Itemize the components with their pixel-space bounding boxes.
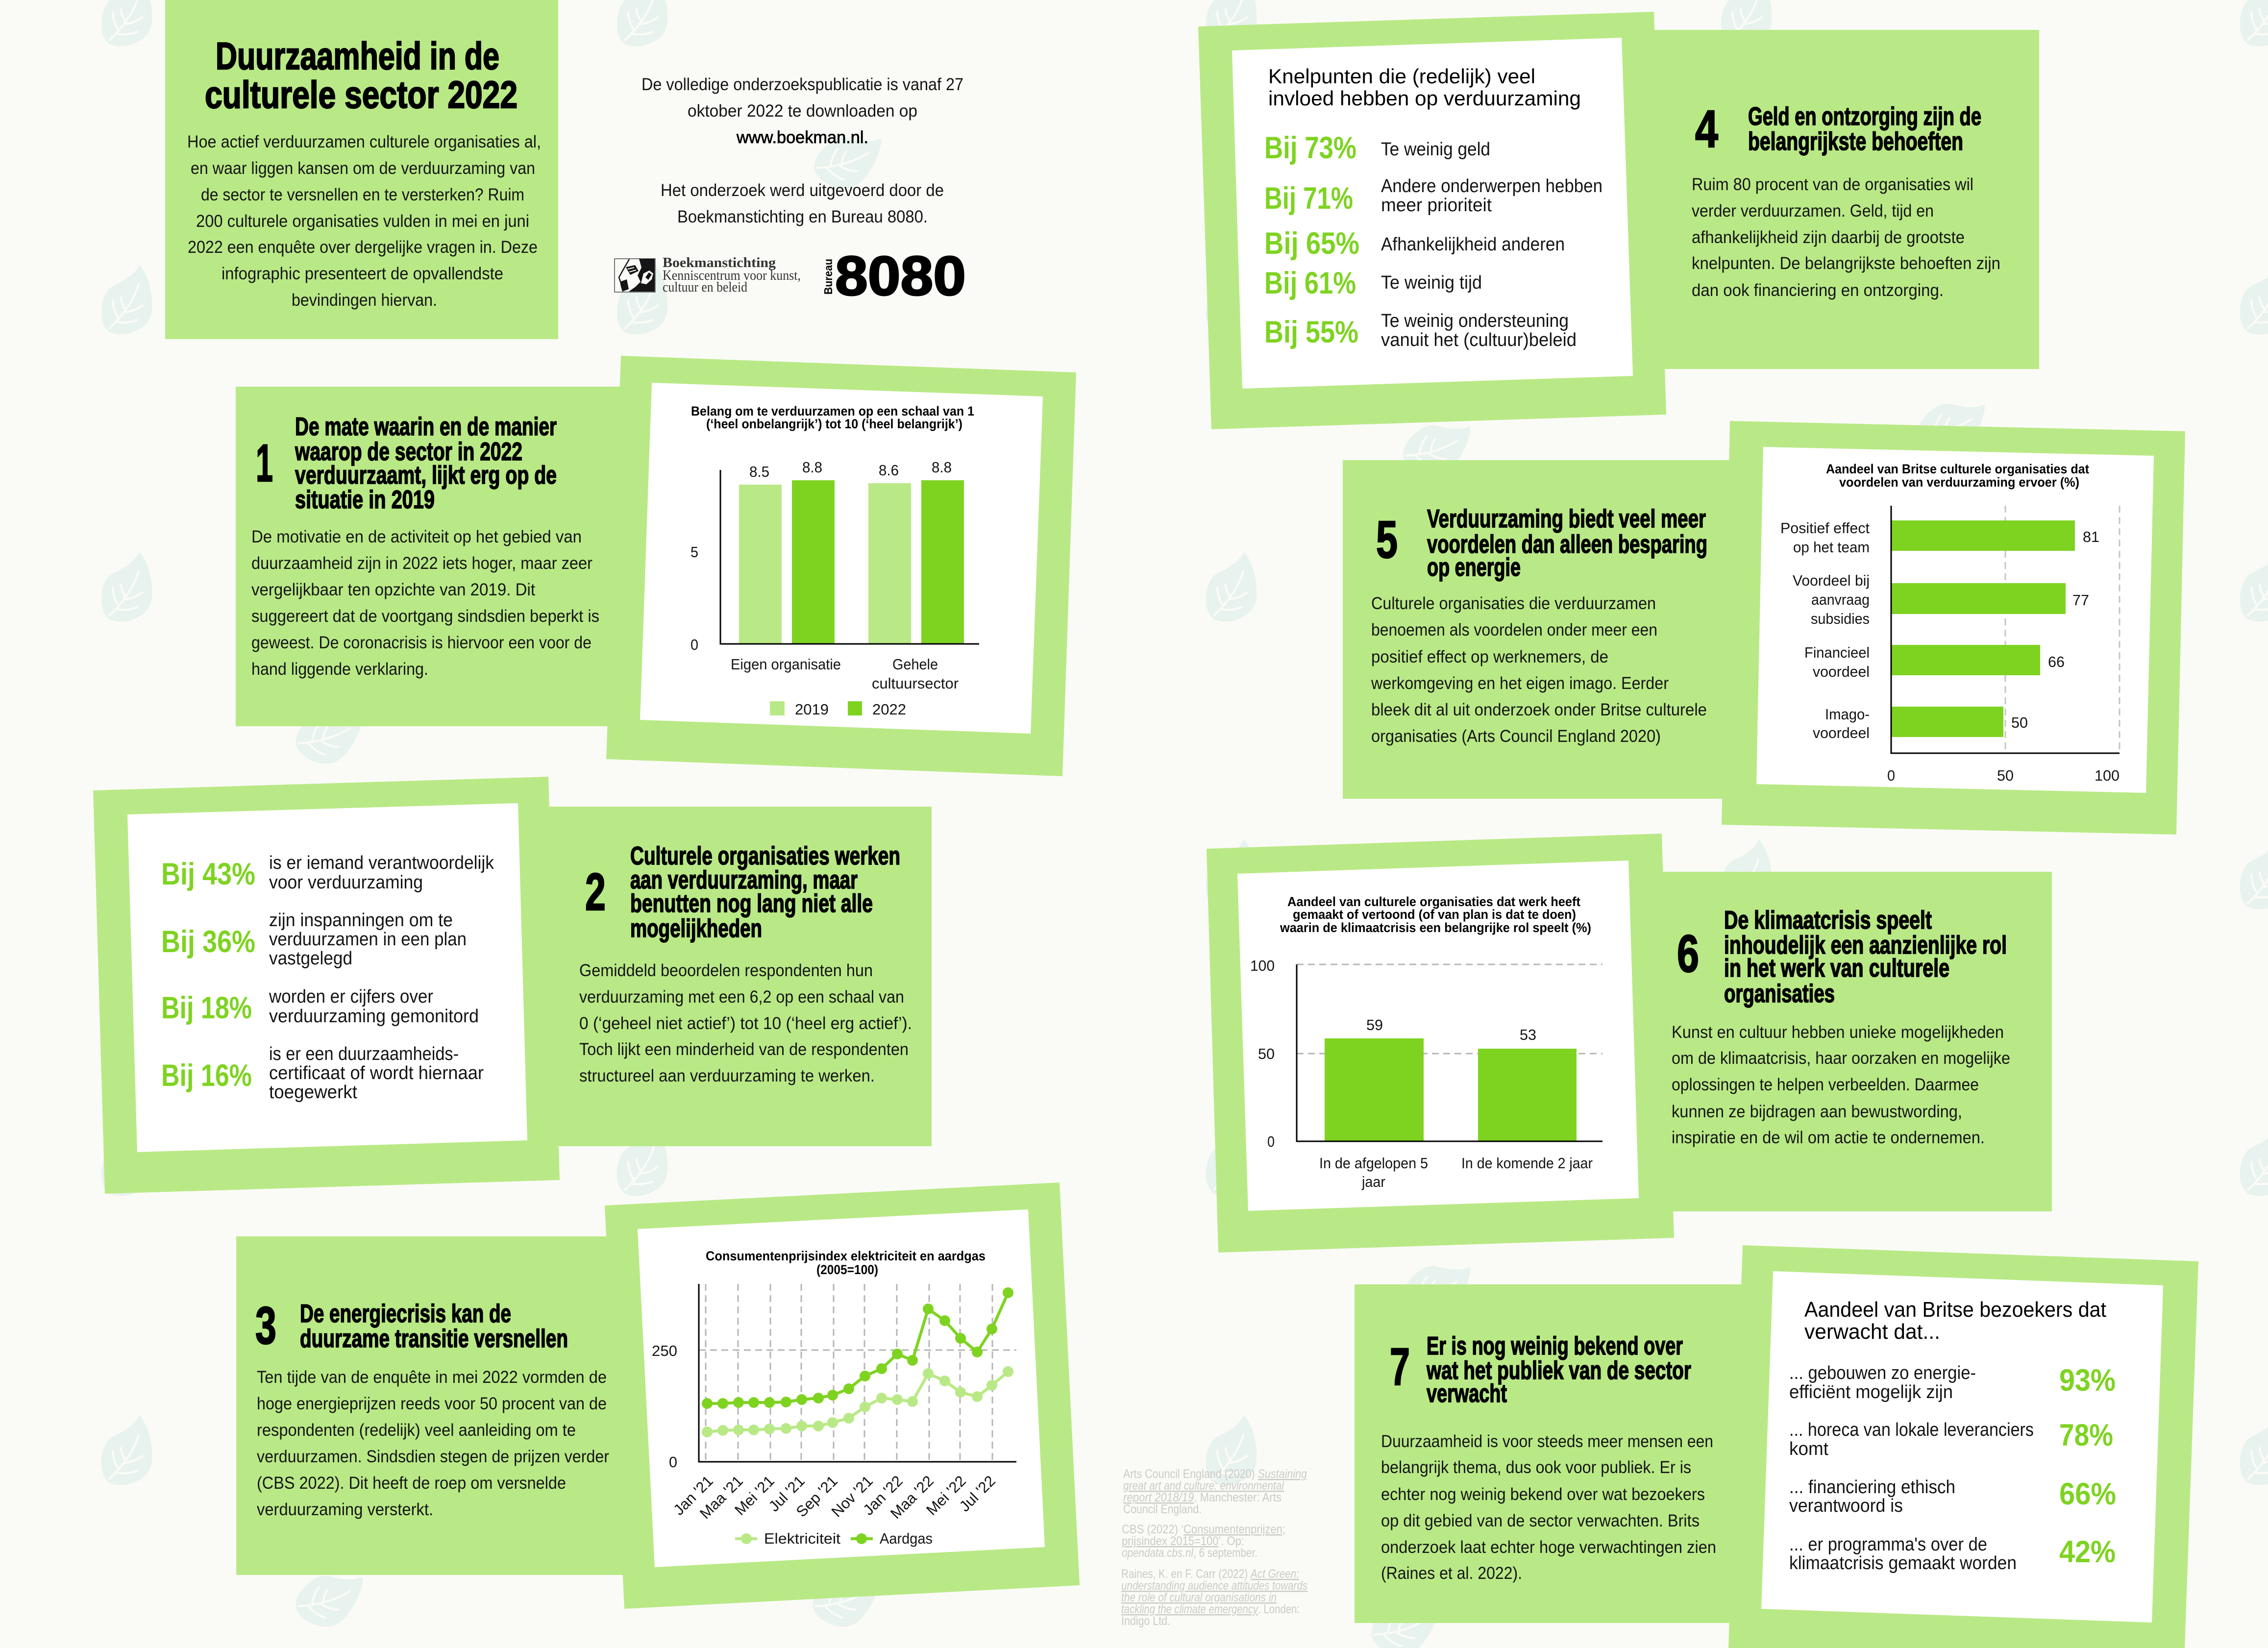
horizontal bar chart: benefits: 81 [2083, 528, 2099, 545]
visitors rows [1789, 1363, 2034, 1574]
heading 6: in het werk van culturele [1724, 954, 1949, 983]
heading 6: organisaties [1724, 980, 1835, 1008]
visitors title: Aandeel van Britse bezoekers dat [1804, 1298, 2106, 1322]
body text 3: (CBS 2022). Dit heeft de roep om versnelde [257, 1474, 566, 1493]
visitors rows: ... horeca van lokale leveranciers [1789, 1420, 2034, 1440]
body text 1: duurzaamheid zijn in 2022 iets hoger, maar zeer [251, 554, 592, 573]
introduction text: 2022 een enquête over dergelijke vragen in. Deze [188, 238, 538, 257]
bottlenecks labels: vanuit het (cultuur)beleid [1381, 330, 1577, 350]
chart title: Consumentenprijsindex elektriciteit en aardgas [706, 1249, 986, 1263]
heading 3 [300, 1300, 568, 1353]
heading 5: op energie [1427, 553, 1521, 582]
panel: bottlenecks frame [1198, 12, 1666, 429]
number 6: 6 [1677, 924, 1699, 983]
horizontal bar chart: benefits: Imago- [1825, 706, 1870, 723]
row 43% [161, 853, 494, 893]
horizontal bar chart: benefits [1780, 506, 2120, 784]
heading 1: waarop de sector in 2022 [295, 438, 522, 466]
row 36%: vastgelegd [269, 948, 352, 969]
introduction text: bevindingen hiervan. [292, 291, 437, 310]
publication note: Het onderzoek werd uitgevoerd door de [661, 181, 944, 200]
heading 1: verduurzaamt, lijkt erg op de [295, 461, 557, 490]
line chart: price index: Jan '21 [670, 1472, 716, 1519]
body text 4: Ruim 80 procent van de organisaties wil [1692, 175, 1973, 194]
chart title [706, 1249, 986, 1277]
heading 6: inhoudelijk een aanzienlijke rol [1724, 931, 2007, 959]
references: Raines, K. en F. Carr (2022) Act Green: [1121, 1567, 1299, 1581]
heading 2: Culturele organisaties werken [630, 842, 900, 870]
introduction text: Hoe actief verduurzamen culturele organisaties al, [187, 132, 541, 151]
references: the role of cultural organisations in [1121, 1591, 1277, 1604]
body text 1: hand liggende verklaring. [251, 660, 428, 679]
bar chart: importance: 0 [690, 636, 698, 653]
row 36% [161, 910, 467, 969]
bar chart: climate work: jaar [1361, 1173, 1385, 1190]
logo: Boekmanstichting [615, 255, 801, 295]
logo: Bureau 8080: Bureau [822, 259, 835, 295]
references [1121, 1467, 1307, 1628]
row 43%: voor verduurzaming [269, 872, 423, 893]
bar chart: climate work: In de komende 2 jaar [1461, 1155, 1593, 1172]
heading 7: verwacht [1427, 1379, 1507, 1408]
body text 2: Gemiddeld beoordelen respondenten hun [579, 961, 873, 980]
legend [735, 1530, 933, 1547]
chart title: voordelen van verduurzaming ervoer (%) [1839, 475, 2079, 490]
body text 5 [1371, 594, 1707, 746]
body text 5: positief effect op werknemers, de [1371, 647, 1608, 666]
publication note: Boekmanstichting en Bureau 8080. [677, 207, 928, 226]
line chart: price index: Jan '22 [860, 1472, 906, 1519]
bar chart: climate work: 59 [1366, 1016, 1383, 1033]
heading 3: duurzame transitie versnellen [300, 1325, 568, 1353]
chart title: Aandeel van Britse culturele organisaties dat [1826, 462, 2089, 476]
bottlenecks percentages [1264, 131, 1359, 349]
body text 2 [579, 961, 912, 1085]
body text 1: suggereert dat de voortgang sindsdien beperkt is [251, 607, 599, 626]
body text 7 [1381, 1432, 1716, 1583]
row 16%: toegewerkt [269, 1082, 357, 1103]
row 18%: verduurzaming gemonitord [269, 1006, 479, 1027]
bar chart: climate work: In de afgelopen 5 [1319, 1155, 1428, 1172]
bar chart: importance [690, 459, 979, 692]
heading 4: Geld en ontzorging zijn de [1748, 102, 1981, 131]
heading 5: Verduurzaming biedt veel meer [1427, 505, 1706, 533]
bottlenecks labels: Te weinig ondersteuning [1381, 311, 1569, 331]
bottlenecks percentages: Bij 73% [1264, 131, 1356, 165]
visitors percentages: 93% [2059, 1363, 2116, 1398]
bar chart: climate work: 53 [1520, 1026, 1536, 1043]
row 16% [161, 1044, 484, 1103]
horizontal bar chart: benefits: 50 [1997, 767, 2014, 784]
chart title: (‘heel onbelangrijk’) tot 10 (‘heel belangrijk’) [706, 417, 962, 431]
line chart: price index [652, 1284, 1016, 1522]
chart title: waarin de klimaatcrisis een belangrijke rol speelt (%) [1280, 920, 1591, 935]
horizontal bar chart: benefits: subsidies [1811, 610, 1870, 627]
bar chart: climate work [1250, 957, 1602, 1190]
row 36%: verduurzamen in een plan [269, 929, 467, 950]
logo: Bureau 8080: 8080 [835, 245, 966, 307]
panel: finding 1 [236, 387, 632, 726]
body text 6: kunnen ze bijdragen aan bewustwording, [1672, 1102, 1962, 1121]
body text 3: Ten tijde van de enquête in mei 2022 vormden de [257, 1368, 607, 1387]
heading 1: De mate waarin en de manier [295, 413, 557, 441]
visitors percentages [2059, 1363, 2116, 1569]
introduction text: 200 culturele organisaties vulden in mei en juni [196, 212, 529, 231]
body text 4: dan ook financiering en ontzorging. [1692, 281, 1944, 300]
body text 4 [1692, 175, 2000, 300]
number 3: 3 [255, 1296, 276, 1355]
title [205, 34, 518, 116]
references: Arts Council England (2020) Sustaining [1123, 1467, 1307, 1481]
number 5: 5 [1376, 510, 1398, 569]
body text 6 [1672, 1023, 2010, 1147]
row 36%: Bij 36% [161, 925, 255, 959]
panel: finding 4 [1642, 30, 2039, 369]
body text 5: Culturele organisaties die verduurzamen [1371, 594, 1656, 613]
horizontal bar chart: benefits: Voordeel bij [1793, 572, 1870, 589]
body text 2: verduurzaming met een 6,2 op een schaal van [579, 987, 904, 1007]
panel: frame with percentages 2 [93, 777, 560, 1194]
row 43%: Bij 43% [161, 857, 255, 891]
horizontal bar chart: benefits: 0 [1887, 767, 1895, 784]
chart title [1826, 462, 2089, 490]
line chart: price index: Nov '21 [828, 1472, 876, 1521]
bar chart: climate work: 50 [1258, 1045, 1275, 1062]
references: CBS (2022) ‘Consumentenprijzen; [1122, 1523, 1285, 1536]
row 16%: is er een duurzaamheids- [269, 1044, 459, 1064]
panel: visitors frame [1728, 1245, 2198, 1648]
body text 7: echter nog weinig bekend over wat bezoekers [1381, 1485, 1705, 1504]
logo: Boekmanstichting: Kenniscentrum voor kunst, [663, 268, 801, 283]
bar chart: importance: 8.5 [749, 463, 769, 480]
panel: finding 6 [1647, 872, 2052, 1211]
bottlenecks percentages: Bij 55% [1264, 315, 1358, 349]
body text 7: Duurzaamheid is voor steeds meer mensen een [1381, 1432, 1713, 1451]
number 7: 7 [1390, 1337, 1410, 1396]
horizontal bar chart: benefits: voordeel [1813, 724, 1870, 741]
bar chart: importance: 8.8 [802, 459, 822, 476]
bar chart: importance: 8.8 [932, 459, 952, 476]
visitors rows: klimaatcrisis gemaakt worden [1789, 1553, 2017, 1574]
visitors rows: ... gebouwen zo energie- [1789, 1363, 1976, 1383]
logo: Boekmanstichting: cultuur en beleid [663, 280, 747, 295]
legend: 2022 [872, 701, 906, 718]
row 18% [161, 986, 479, 1027]
publication note: De volledige onderzoekspublicatie is vanaf 27 [641, 75, 963, 94]
line chart: price index: Mei '22 [923, 1472, 969, 1519]
bottlenecks labels [1381, 139, 1602, 350]
visitors rows: ... er programma's over de [1789, 1534, 1987, 1555]
body text 4: afhankelijkheid zijn daarbij de grootste [1692, 228, 1965, 247]
references: understanding audience attitudes towards [1121, 1579, 1307, 1593]
bottlenecks labels: Andere onderwerpen hebben [1381, 176, 1602, 197]
heading 2: mogelijkheden [630, 914, 762, 943]
horizontal bar chart: benefits: Financieel [1804, 644, 1870, 661]
body text 7: op dit gebied van de sector verwachten. Brits [1381, 1511, 1700, 1530]
horizontal bar chart: benefits: 77 [2072, 591, 2089, 609]
body text 7: onderzoek laat echter hoge verwachtingen zien [1381, 1538, 1716, 1557]
visitors percentages: 66% [2059, 1477, 2116, 1511]
panel: chart frame 1 [606, 356, 1076, 776]
body text 3: verduurzamen. Sindsdien stegen de prijzen verder [257, 1447, 609, 1466]
body text 7: belangrijk thema, dus ook voor publiek. Er is [1381, 1458, 1691, 1477]
introduction text [187, 132, 541, 310]
line chart: price index: Jul '21 [765, 1472, 808, 1515]
visitors title: verwacht dat... [1804, 1320, 1940, 1344]
publication note: www.boekman.nl. [736, 128, 868, 147]
body text 2: structureel aan verduurzaming te werken. [579, 1066, 875, 1085]
bottlenecks title [1268, 65, 1581, 110]
horizontal bar chart: benefits: 50 [2011, 714, 2028, 731]
chart title [691, 404, 974, 431]
horizontal bar chart: benefits: aanvraag [1811, 591, 1870, 608]
panel: finding 7 [1355, 1284, 1750, 1623]
row 18%: worden er cijfers over [269, 986, 433, 1007]
body text 7: (Raines et al. 2022). [1381, 1564, 1522, 1583]
line chart: price index: Maa '22 [887, 1472, 937, 1522]
row 43%: is er iemand verantwoordelijk [269, 853, 494, 873]
row 18%: Bij 18% [161, 991, 252, 1025]
bottlenecks title: Knelpunten die (redelijk) veel [1268, 65, 1535, 88]
body text 6: inspiratie en de wil om actie te ondernemen. [1672, 1128, 1985, 1147]
visitors rows: komt [1789, 1439, 1828, 1459]
heading 3: De energiecrisis kan de [300, 1300, 511, 1328]
body text 1: geweest. De coronacrisis is hiervoor een voor de [251, 633, 592, 652]
references: prijsindex 2015=100’. Op: [1122, 1534, 1244, 1548]
body text 5: bleek dit al uit onderzoek onder Britse culturele [1371, 700, 1707, 719]
bar chart: importance: 8.6 [879, 462, 899, 479]
chart title: Belang om te verduurzamen op een schaal van 1 [691, 404, 974, 418]
heading 6 [1724, 906, 2007, 1008]
body text 5: werkomgeving en het eigen imago. Eerder [1371, 674, 1669, 693]
horizontal bar chart: benefits: op het team [1793, 539, 1870, 556]
publication note [641, 75, 963, 226]
line chart: price index: 250 [652, 1342, 677, 1359]
visitors title [1804, 1298, 2106, 1344]
references: Indigo Ltd. [1121, 1614, 1170, 1628]
chart title: Aandeel van culturele organisaties dat werk heeft [1287, 894, 1580, 909]
references: tackling the climate emergency. Londen: [1121, 1602, 1300, 1616]
panel: finding 2 [539, 807, 932, 1146]
number 2: 2 [585, 862, 606, 921]
panel: finding 3 [236, 1236, 632, 1575]
heading 7 [1426, 1332, 1691, 1408]
heading 1: situatie in 2019 [295, 486, 435, 514]
visitors rows: efficiënt mogelijk zijn [1789, 1382, 1953, 1402]
bottlenecks labels: Te weinig tijd [1381, 272, 1482, 293]
row 16%: Bij 16% [161, 1058, 252, 1093]
heading 7: Er is nog weinig bekend over [1427, 1332, 1683, 1360]
body text 6: om de klimaatcrisis, haar oorzaken en mogelijke [1672, 1049, 2010, 1068]
references: opendata.cbs.nl, 6 september. [1122, 1546, 1257, 1560]
visitors rows: verantwoord is [1789, 1496, 1903, 1516]
publication note: oktober 2022 te downloaden op [688, 101, 917, 121]
line chart: price index: 0 [669, 1453, 677, 1471]
bar chart: climate work: 100 [1250, 957, 1275, 974]
horizontal bar chart: benefits: 100 [2095, 767, 2120, 784]
bar chart: importance: Eigen organisatie [731, 656, 841, 673]
bottlenecks labels: meer prioriteit [1381, 195, 1492, 216]
heading 7: wat het publiek van de sector [1426, 1356, 1691, 1385]
bottlenecks percentages: Bij 61% [1264, 266, 1356, 300]
heading 2: benutten nog lang niet alle [630, 889, 873, 918]
references: great art and culture: environmental [1123, 1479, 1284, 1493]
panel: chart frame 3 [605, 1182, 1080, 1609]
bar chart: climate work: 0 [1267, 1133, 1275, 1150]
heading 6: De klimaatcrisis speelt [1724, 906, 1932, 935]
title: culturele sector 2022 [205, 73, 518, 116]
body text 3: verduurzaming versterkt. [257, 1500, 433, 1519]
chart title [1280, 894, 1591, 935]
heading 2: aan verduurzaming, maar [630, 866, 858, 894]
number 1: 1 [256, 433, 273, 492]
body text 4: knelpunten. De belangrijkste behoeften zijn [1692, 254, 2000, 273]
line chart: price index: Mei '21 [731, 1472, 778, 1519]
bottlenecks percentages: Bij 71% [1264, 181, 1353, 216]
horizontal bar chart: benefits: Positief effect [1780, 519, 1870, 537]
line chart: price index: Jul '22 [956, 1472, 999, 1515]
body text 6: oplossingen te helpen verbeelden. Daarmee [1672, 1075, 1979, 1094]
bar chart: importance: Gehele [892, 656, 938, 673]
visitors percentages: 78% [2059, 1418, 2113, 1452]
bottlenecks percentages: Bij 65% [1264, 226, 1359, 261]
references: Council England. [1123, 1502, 1202, 1516]
panel: chart frame 6 [1207, 834, 1674, 1253]
body text 6: Kunst en cultuur hebben unieke mogelijkheden [1672, 1023, 2004, 1042]
horizontal bar chart: benefits: voordeel [1813, 663, 1870, 680]
body text 3 [257, 1368, 609, 1519]
heading 5: voordelen dan alleen besparing [1427, 530, 1707, 559]
body text 4: verder verduurzamen. Geld, tijd en [1692, 201, 1934, 221]
line chart: price index: Maa '21 [696, 1472, 746, 1522]
heading 4: belangrijkste behoeften [1748, 127, 1963, 156]
bottlenecks labels: Te weinig geld [1381, 139, 1490, 160]
visitors rows: ... financiering ethisch [1789, 1477, 1955, 1498]
heading 4 [1748, 102, 1981, 156]
heading 1 [295, 413, 557, 514]
body text 5: benoemen als voordelen onder meer een [1371, 620, 1657, 640]
body text 2: Toch lijkt een minderheid van de respondenten [579, 1040, 909, 1059]
heading 2 [630, 842, 900, 943]
introduction text: infographic presenteert de opvallendste [222, 264, 503, 283]
number 4: 4 [1695, 99, 1718, 158]
logo: Boekmanstichting: Boekmanstichting [663, 255, 776, 271]
body text 1: vergelijkbaar ten opzichte van 2019. Dit [251, 580, 535, 599]
row 36%: zijn inspanningen om te [269, 910, 453, 931]
horizontal bar chart: benefits: 66 [2048, 653, 2065, 670]
introduction text: en waar liggen kansen om de verduurzaming van [191, 159, 535, 178]
title: Duurzaamheid in de [216, 34, 499, 77]
row 16%: certificaat of wordt hiernaar [269, 1063, 484, 1083]
body text 1: De motivatie en de activiteit op het gebied van [251, 527, 582, 546]
bar chart: importance: cultuursector [872, 675, 959, 692]
heading 5 [1427, 505, 1707, 582]
body text 5: organisaties (Arts Council England 2020) [1371, 727, 1661, 746]
legend: Elektriciteit [764, 1530, 840, 1547]
bottlenecks labels: Afhankelijkheid anderen [1381, 234, 1565, 255]
chart title: gemaakt of vertoond (of van plan is dat te doen) [1293, 907, 1576, 922]
panel: chart frame 5 [1722, 421, 2185, 835]
legend [770, 701, 906, 718]
body text 3: hoge energieprijzen reeds voor 50 procent van de [257, 1394, 607, 1413]
line chart: price index: Sep '21 [793, 1472, 841, 1521]
body text 3: respondenten (redelijk) veel aanleiding om te [257, 1421, 576, 1440]
panel: finding 5 [1343, 460, 1750, 799]
body text 2: 0 (‘geheel niet actief’) tot 10 (‘heel erg actief’). [579, 1014, 912, 1033]
bottlenecks title: invloed hebben op verduurzaming [1268, 87, 1581, 110]
body text 1 [251, 527, 599, 679]
panel: title and introduction [165, 0, 558, 339]
bar chart: importance: 5 [690, 543, 698, 561]
introduction text: de sector te versnellen en te versterken? Ruim [201, 185, 524, 204]
legend: 2019 [795, 701, 829, 718]
chart title: (2005=100) [816, 1262, 878, 1277]
legend: Aardgas [880, 1530, 933, 1547]
references: report 2018/19. Manchester: Arts [1123, 1491, 1282, 1504]
visitors percentages: 42% [2059, 1535, 2116, 1569]
